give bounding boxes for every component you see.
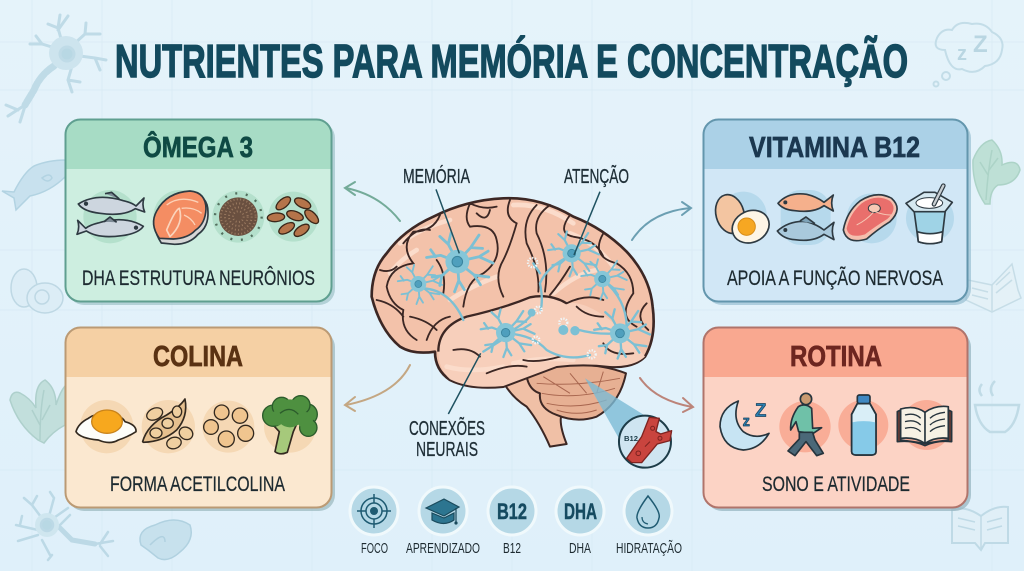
magnified blood vessel [619,416,672,468]
icon: hidratação [616,487,682,557]
icon: dha: DHA [569,540,591,557]
icon: dha: DHA [564,499,597,524]
pointer lines [436,189,600,414]
heading: rotina: ROTINA [790,341,882,373]
icon: aprendizado [406,487,480,557]
icons: rotina: z [743,414,750,430]
arrow: brain to rotina [640,378,693,412]
arrow: brain to vitamin B12 [632,202,691,240]
magnifier cone [585,378,647,443]
arrow: brain to colina [345,365,410,411]
background icon: tea cup [975,381,1019,432]
panel: colina [66,328,335,511]
brain illustration [372,189,672,468]
background icon: leaf left [10,380,65,443]
caption: rotina: SONO E ATIVIDADE [762,473,910,496]
cerebrum [372,198,654,387]
icon: dha [556,487,604,557]
icon: hidratação: HIDRATAÇÃO [616,540,682,557]
background icon: sleep cloud: z [957,43,967,65]
panel: vitamina B12 [704,120,971,305]
background icon: book right [966,264,1021,312]
background icon: neuron top left [6,15,106,122]
caption: colina: FORMA ACETILCOLINA [110,473,285,496]
icon: b12: B12 [497,499,527,524]
panel: rotina [704,328,971,511]
icons: rotina: Z [755,400,766,421]
heading: omega 3: ÔMEGA 3 [143,130,253,164]
heading: colina: COLINA [153,341,243,373]
caption: omega 3: DHA ESTRUTURA NEURÔNIOS [82,267,315,290]
icons: rotina [720,393,952,456]
background icon: salmon steak [140,520,191,560]
heading: vitamina B12: VITAMINA B12 [749,132,920,164]
background icon: fish left [2,160,66,210]
arrow: brain to omega 3 [345,182,400,221]
icon: aprendizado: APRENDIZADO [406,540,480,557]
panel: omega 3 [66,120,335,305]
food icons: colina [76,396,317,454]
background icon: book bottom right [952,507,1008,550]
background icon: sleep cloud [934,23,1003,86]
cerebellum [526,365,626,420]
magnified blood vessel: B12 [624,434,638,443]
caption: vitamina B12: APOIA A FUNÇÃO NERVOSA [727,266,943,290]
label: memória: MEMÓRIA [403,165,470,188]
background icon: sleep cloud: Z [973,31,988,58]
label: conexões neurais: NEURAIS [416,439,478,461]
icon: foco [350,487,398,557]
label: atenção: ATENÇÃO [564,164,629,188]
background icon: egg left [11,269,63,313]
label: conexões neurais [409,416,485,461]
icon row [350,487,682,557]
label: conexões neurais: CONEXÕES [409,416,485,440]
neural network [398,231,650,359]
icon: b12 [488,487,536,557]
background icon: leaf right [973,140,1020,204]
background icon: neuron bottom left [16,492,113,560]
food icons: omega 3 [77,190,321,244]
icon: foco: FOCO [361,540,388,557]
food icons: vitamina B12 [711,186,954,249]
icon: b12: B12 [503,540,521,557]
brain stem [505,377,567,447]
